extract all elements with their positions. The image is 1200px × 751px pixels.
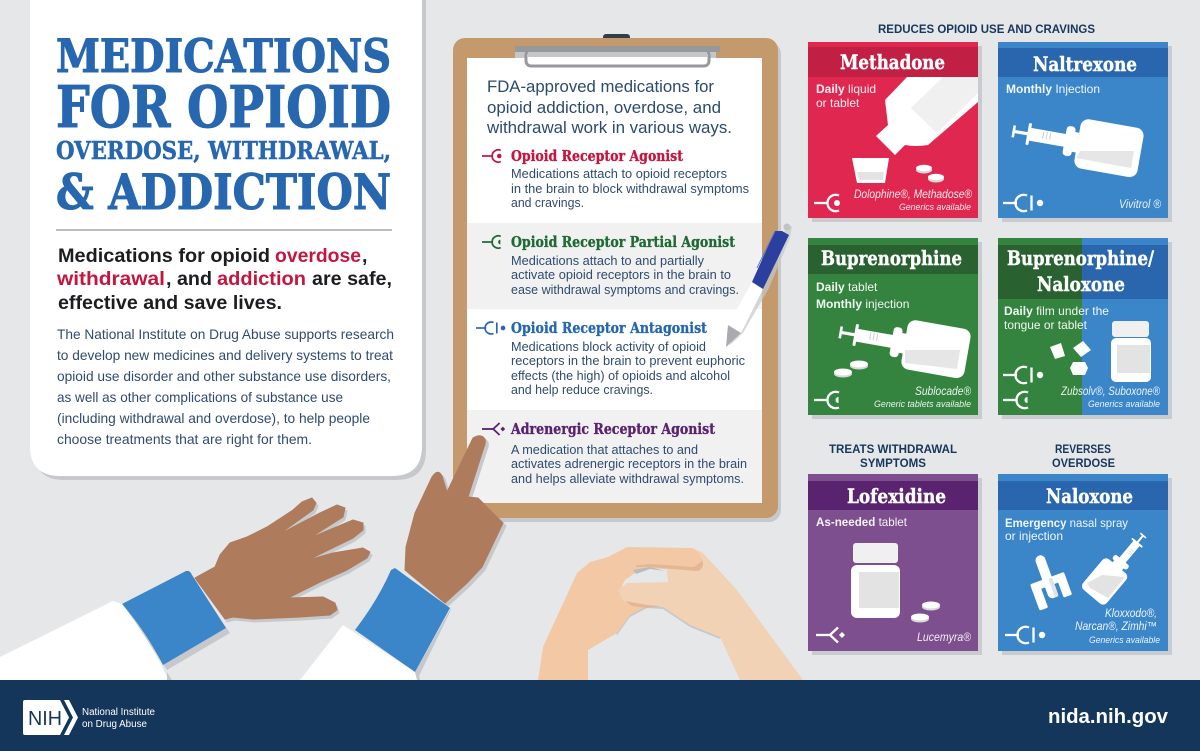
intro text: withdrawal work in various ways. bbox=[486, 118, 732, 137]
subheading: , and bbox=[166, 268, 212, 290]
subheading: overdose bbox=[275, 245, 361, 267]
row: opioid receptor antagonist: receptors in the brain to prevent euphoric bbox=[511, 353, 746, 368]
row: adrenergic receptor agonist: Adrenergic Receptor Agonist bbox=[510, 421, 715, 438]
title: & ADDICTION bbox=[56, 163, 391, 221]
panel: introduction bbox=[30, 0, 426, 480]
row: opioid receptor partial agonist: activate opioid receptors in the brain to bbox=[511, 267, 731, 282]
section heading: reverses overdose: OVERDOSE bbox=[1052, 457, 1115, 470]
row: opioid receptor antagonist bbox=[476, 320, 746, 397]
illustration: left hand and sleeve bbox=[0, 498, 372, 680]
icon: bottle and tablets bbox=[851, 543, 940, 622]
icon: bottle and film bbox=[1050, 321, 1151, 382]
subheading bbox=[56, 245, 392, 314]
title bbox=[56, 29, 391, 221]
illustration: pointing hand and sleeve bbox=[300, 436, 506, 680]
card: lofexidine: Lucemyra® bbox=[917, 631, 971, 644]
card: buprenorphine/naloxone: Buprenorphine/ bbox=[1007, 247, 1155, 270]
icon: pen bbox=[726, 224, 792, 347]
section heading: treats withdrawal bbox=[829, 443, 957, 470]
section heading: treats withdrawal: SYMPTOMS bbox=[860, 457, 926, 470]
card: naloxone bbox=[998, 474, 1172, 655]
row: opioid receptor agonist bbox=[482, 148, 749, 210]
subheading: , bbox=[362, 245, 367, 267]
organization name: National Institute bbox=[82, 707, 155, 718]
card: methadone: Dolophine®, Methadose® bbox=[854, 188, 972, 201]
row: opioid receptor partial agonist bbox=[467, 223, 762, 309]
row: opioid receptor agonist: and cravings. bbox=[511, 195, 584, 210]
card: buprenorphine: Generic tablets available bbox=[874, 399, 971, 410]
organization name: on Drug Abuse bbox=[82, 719, 147, 730]
subheading: withdrawal bbox=[56, 268, 165, 290]
title: MEDICATIONS bbox=[56, 29, 391, 83]
card: lofexidine bbox=[808, 474, 982, 655]
subheading: effective and save lives. bbox=[58, 292, 282, 314]
body text: to develop new medicines and delivery systems to treat bbox=[57, 348, 393, 363]
card: lofexidine: As-needed tablet bbox=[816, 515, 908, 529]
body text: as well as other complications of substance use bbox=[57, 390, 343, 405]
intro text bbox=[486, 77, 732, 137]
card: buprenorphine/naloxone: Naloxone bbox=[1037, 273, 1125, 296]
row: adrenergic receptor agonist: activates adrenergic receptors in the brain bbox=[511, 456, 747, 471]
icon: nasal spray bbox=[1022, 549, 1073, 611]
row: opioid receptor antagonist: Medications block activity of opioid bbox=[511, 339, 706, 354]
card: buprenorphine/naloxone: Generics available bbox=[1088, 399, 1160, 410]
body text: choose treatments that are right for them. bbox=[57, 432, 312, 447]
row: opioid receptor agonist: Medications attach to opioid receptors bbox=[511, 166, 727, 181]
body text: (including withdrawal and overdose), to help people bbox=[57, 411, 370, 426]
card: buprenorphine bbox=[808, 238, 982, 419]
title: FOR OPIOID bbox=[56, 74, 391, 141]
title: OVERDOSE, WITHDRAWAL, bbox=[56, 136, 391, 165]
card: naltrexone: Naltrexone bbox=[1033, 53, 1137, 76]
intro text: FDA-approved medications for bbox=[487, 77, 714, 96]
card: naloxone: or injection bbox=[1005, 529, 1063, 543]
row: opioid receptor antagonist: and help reduce cravings. bbox=[511, 382, 653, 397]
clip bbox=[515, 46, 720, 66]
card: methadone bbox=[808, 42, 982, 222]
subheading: are safe, bbox=[312, 268, 392, 290]
logo: NIH bbox=[23, 700, 78, 735]
card: methadone: Generics available bbox=[899, 202, 971, 213]
card: buprenorphine/naloxone: Daily film under the bbox=[1004, 304, 1109, 318]
row: opioid receptor antagonist: effects (the high) of opioids and alcohol bbox=[511, 368, 730, 383]
card: naloxone: Narcan®, Zimhi™ bbox=[1075, 620, 1157, 633]
card: naloxone: Emergency nasal spray bbox=[1005, 516, 1128, 530]
row: opioid receptor partial agonist: Opioid Receptor Partial Agonist bbox=[511, 234, 735, 251]
subheading: Medications for opioid bbox=[58, 245, 270, 267]
card: methadone: Daily liquid bbox=[816, 82, 876, 96]
icon: injection vial bbox=[1080, 525, 1156, 607]
card: methadone: Methadone bbox=[840, 51, 945, 74]
website: nida.nih.gov bbox=[1048, 706, 1169, 728]
body text: The National Institute on Drug Abuse supports research bbox=[57, 327, 394, 342]
card: naltrexone: Monthly Injection bbox=[1006, 82, 1100, 96]
logo: NIH: NIH bbox=[28, 707, 62, 730]
row: opioid receptor antagonist: Opioid Receptor Antagonist bbox=[511, 320, 707, 337]
section heading: reverses overdose: REVERSES bbox=[1055, 443, 1111, 456]
card: methadone: or tablet bbox=[816, 96, 860, 110]
card: buprenorphine/naloxone bbox=[998, 238, 1172, 419]
body text: opioid use disorder and other substance use disorders, bbox=[57, 369, 391, 384]
row: opioid receptor agonist: Opioid Receptor Agonist bbox=[511, 148, 683, 165]
row: opioid receptor partial agonist: Medications attach to and partially bbox=[511, 253, 705, 268]
row: opioid receptor agonist: in the brain to block withdrawal symptoms bbox=[511, 181, 749, 196]
organization name bbox=[82, 707, 155, 730]
card: buprenorphine: Sublocade® bbox=[915, 385, 971, 398]
card: buprenorphine: Daily tablet bbox=[816, 280, 878, 294]
icon: methadone bottle bbox=[852, 77, 978, 183]
body text bbox=[57, 327, 394, 447]
row: opioid receptor partial agonist: ease withdrawal symptoms and cravings. bbox=[511, 282, 739, 297]
row: adrenergic receptor agonist: and helps alleviate withdrawal symptoms. bbox=[511, 471, 744, 486]
row: adrenergic receptor agonist: A medication that attaches to and bbox=[511, 442, 698, 457]
icon: syringe and vial bbox=[1008, 107, 1145, 178]
subheading: addiction bbox=[217, 268, 306, 290]
card: buprenorphine/naloxone: tongue or tablet bbox=[1004, 318, 1088, 332]
card: naltrexone: Vivitrol ® bbox=[1119, 198, 1161, 211]
illustration: patient hands bbox=[538, 547, 803, 680]
section heading: treats withdrawal: TREATS WITHDRAWAL bbox=[829, 443, 957, 456]
card: buprenorphine: Buprenorphine bbox=[821, 247, 962, 270]
card: naloxone: Naloxone bbox=[1046, 485, 1133, 508]
section heading: reverses overdose bbox=[1052, 443, 1115, 470]
row: adrenergic receptor agonist bbox=[467, 410, 762, 503]
footer band bbox=[0, 680, 1200, 751]
intro text: opioid addiction, overdose, and bbox=[487, 98, 721, 117]
card: buprenorphine: Monthly injection bbox=[816, 297, 909, 311]
icon: syringe, vial and tablets bbox=[834, 308, 972, 379]
card: naloxone: Kloxxodo®, bbox=[1105, 607, 1157, 620]
card: naltrexone bbox=[998, 42, 1172, 222]
clipboard bbox=[453, 34, 781, 522]
section heading: reduces use: REDUCES OPIOID USE AND CRAVINGS bbox=[878, 23, 1095, 36]
card: buprenorphine/naloxone: Zubsolv®, Suboxone® bbox=[1060, 385, 1160, 398]
card: lofexidine: Lofexidine bbox=[847, 485, 946, 508]
card: naloxone: Generics available bbox=[1089, 635, 1160, 646]
